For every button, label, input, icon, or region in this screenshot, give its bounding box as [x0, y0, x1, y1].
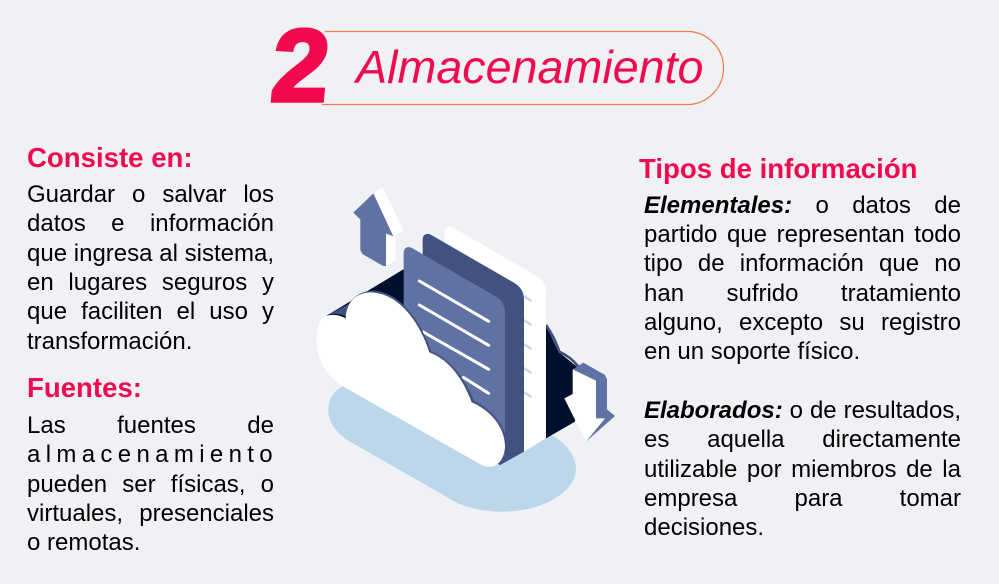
text: Elaborados: utilizable por miembros de la	[644, 456, 961, 483]
down arrow	[564, 363, 615, 442]
text: Elementales: tipo de información que no	[644, 250, 961, 277]
white document ticks	[525, 297, 530, 396]
dark blue document	[423, 234, 524, 465]
text: Elementales: partido que representan todo	[644, 221, 961, 248]
white document	[445, 227, 546, 452]
cloud shadow	[328, 386, 576, 512]
text: Consiste en	[27, 181, 274, 355]
heading: Fuentes: Fuentes:	[27, 372, 142, 403]
text: Elaborados	[644, 397, 961, 541]
step number 2: 2	[267, 8, 334, 123]
up arrow	[353, 187, 403, 266]
text: Elementales: han sufrido tratamiento	[644, 280, 961, 307]
text: Consiste en: Guardar o salvar los	[27, 181, 274, 208]
text: Elaborados: empresa para tomar	[644, 485, 961, 512]
text: Consiste en: que faciliten el uso y	[27, 298, 274, 325]
illustration: cloud storage with documents	[316, 187, 615, 512]
document lines	[419, 281, 489, 393]
text: Elaborados: es aquella directamente	[644, 426, 961, 453]
cloud edge shadow	[346, 291, 507, 465]
dark cloud back	[327, 269, 577, 465]
text: Fuentes: pueden ser físicas, o	[27, 471, 274, 498]
text: Fuentes	[27, 412, 278, 556]
text: Fuentes: Las fuentes de	[27, 412, 274, 439]
text: Consiste en: datos e información	[27, 210, 274, 237]
heading: Consiste en: Consiste en:	[27, 142, 193, 173]
title banner	[267, 8, 724, 123]
text: Elementales	[644, 192, 961, 365]
text: Consiste en: en lugares seguros y	[27, 269, 274, 296]
title text: Almacenamiento	[356, 41, 704, 93]
text: Elementales: Elementales: o datos de	[644, 192, 961, 218]
text: Elementales: en un soporte físico.	[644, 338, 860, 365]
title pill outline	[322, 30, 724, 106]
text: Elementales: alguno, excepto su registro	[644, 309, 961, 336]
back cloud edge	[546, 325, 578, 367]
text: Fuentes: almacenamiento	[27, 441, 278, 468]
text: Consiste en: transformación.	[27, 328, 192, 355]
white cloud	[317, 292, 505, 467]
heading: Tipos de información: Tipos de información	[639, 153, 918, 184]
text: Fuentes: virtuales, presenciales	[27, 500, 274, 527]
text: Fuentes: o remotas.	[27, 529, 140, 556]
mid blue document	[404, 247, 505, 457]
text: Elaborados: Elaborados: o de resultados,	[644, 397, 961, 424]
text: Elaborados: decisiones.	[644, 514, 764, 541]
text: Consiste en: que ingresa al sistema,	[27, 240, 274, 267]
